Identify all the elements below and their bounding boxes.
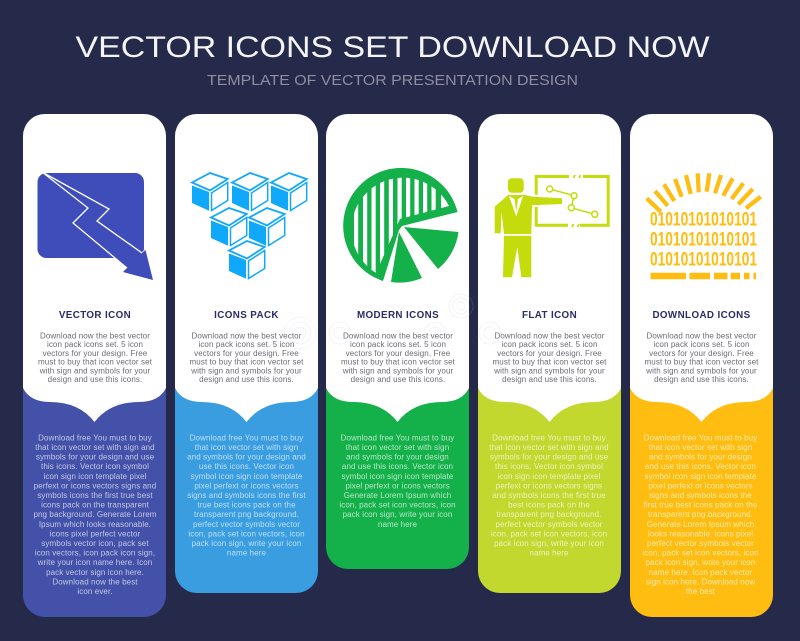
- description: flat icon: design and use this icons.: [502, 375, 597, 384]
- body text: vector icon: icon vectors, icon pack icon sign,: [35, 549, 155, 558]
- description: flat icon: vectors for your design. Free: [497, 349, 602, 358]
- description: flat icon: must to buy that icon vector set: [493, 358, 607, 367]
- description: vector icon: [38, 332, 153, 384]
- body text: flat icon: transparent png background.: [496, 510, 602, 519]
- body text: icons pack: transparent png background.: [194, 510, 299, 519]
- icon: binary code with sunburst: 01010101010101: [650, 250, 757, 271]
- heading: flat icon: FLAT ICON: [522, 310, 577, 321]
- body text: download icons: perfect vector symbols vector: [647, 539, 754, 548]
- heading: vector icon: VECTOR ICON: [59, 310, 131, 321]
- body text: flat icon: perfext or icons vectors signs: [496, 481, 602, 490]
- body text: flat icon: this icons. Vector icon symbol: [495, 462, 603, 471]
- body text: icons pack: and symbols for your design and: [187, 453, 306, 462]
- description: icons pack: icon pack icons set. 5 icon: [198, 340, 295, 349]
- body text: icons pack: that icon vector set with sign: [195, 443, 298, 452]
- panel: icons pack: [175, 114, 318, 593]
- body text: vector icon: [33, 434, 157, 596]
- description: vector icon: design and use this icons.: [48, 375, 142, 384]
- description: download icons: vectors for your design. Free: [649, 349, 754, 358]
- body text: modern icons: and symbols for your design: [346, 453, 449, 462]
- body text: icons pack: signs and symbols icons the first: [187, 491, 306, 500]
- body text: download icons: icon, pack set icon vectors, icon: [642, 549, 759, 558]
- body text: icons pack: pixel perfext or icons vectors: [194, 481, 299, 490]
- description: download icons: [645, 332, 759, 384]
- description: flat icon: icon pack icons set. 5 icon: [501, 340, 598, 349]
- body text: download icons: first true best icons pack on the: [643, 501, 758, 510]
- body text: vector icon: symbols icons the first true best: [37, 491, 153, 500]
- description: flat icon: Download now the best vector: [495, 332, 605, 340]
- body text: modern icons: icon, pack set icon vectors, icon: [339, 501, 456, 510]
- body text: icons pack: pack icon sign, write your icon: [192, 539, 301, 548]
- body text: flat icon: name here: [529, 549, 569, 558]
- title: VECTOR ICONS SET DOWNLOAD NOW: [76, 31, 710, 64]
- heading: download icons: DOWNLOAD ICONS: [652, 310, 751, 321]
- icon: presenter with board: [495, 175, 608, 277]
- body text: flat icon: and symbols icons the first true: [492, 491, 606, 500]
- body text: vector icon: Download free You must to buy: [38, 434, 152, 442]
- panel: download icons: [630, 114, 773, 617]
- description: download icons: with sign and symbols for your: [645, 366, 757, 375]
- body text: vector icon: png background. Generate Lorem: [33, 510, 157, 519]
- body text: download icons: looks reasonable. icons pixel: [648, 529, 753, 538]
- body text: modern icons: pixel perfext or icons vectors: [345, 481, 450, 490]
- body text: download icons: name here. Icon pack vector: [649, 568, 753, 577]
- description: download icons: must to buy that icon vector set: [645, 358, 759, 367]
- body text: vector icon: icons pixel perfect vector: [50, 529, 141, 538]
- description: vector icon: icon pack icons set. 5 icon: [47, 340, 143, 349]
- panel: modern icons: [326, 114, 469, 569]
- icon: lightning arrow in speech box: [38, 172, 153, 280]
- body text: icons pack: [187, 434, 306, 558]
- description: icons pack: [190, 332, 304, 384]
- body text: flat icon: symbols for your design and use: [490, 453, 609, 462]
- description: flat icon: with sign and symbols for your: [493, 366, 605, 375]
- body text: flat icon: [489, 434, 609, 558]
- body text: vector icon: Ipsum which looks reasonable.: [39, 520, 151, 529]
- body text: icons pack: Download free You must to buy: [190, 434, 303, 442]
- body text: modern icons: that icon vector set with sign: [346, 443, 449, 452]
- description: flat icon: [493, 332, 607, 384]
- description: download icons: design and use this icons.: [654, 375, 749, 384]
- body text: download icons: signs and symbols icons the: [649, 491, 752, 500]
- icon: binary code with sunburst: 01010101010101: [650, 230, 757, 251]
- body text: vector icon: this icons. Vector icon symbol: [41, 462, 149, 471]
- body text: download icons: and use this icons. Vector icon: [645, 462, 756, 471]
- body text: icons pack: symbol icon sign icon template: [191, 472, 303, 481]
- body text: flat icon: best icons pack on the: [508, 501, 590, 510]
- icon: pie chart: [343, 165, 458, 285]
- body text: flat icon: icon sign icon template pixel: [498, 472, 601, 481]
- body text: icons pack: name here: [227, 549, 267, 558]
- body text: download icons: and symbols for your design: [649, 453, 752, 462]
- description: modern icons: [341, 332, 456, 384]
- description: download icons: icon pack icons set. 5 icon: [653, 340, 750, 349]
- description: icons pack: Download now the best vector: [192, 332, 302, 340]
- description: vector icon: with sign and symbols for your: [39, 366, 151, 375]
- body text: flat icon: Download free You must to buy: [492, 434, 606, 442]
- description: vector icon: must to buy that icon vector set: [38, 358, 153, 367]
- body text: download icons: transparent png background.: [648, 510, 753, 519]
- panel: vector icon: [23, 114, 166, 617]
- icon: binary code with sunburst: 01010101010101: [650, 210, 757, 231]
- description: modern icons: vectors for your design. Free: [346, 349, 451, 358]
- body text: download icons: sign icon here. Download now: [646, 577, 755, 586]
- body text: modern icons: [339, 434, 456, 529]
- body text: download icons: pack icon sign, write your icon: [646, 558, 755, 567]
- heading: modern icons: MODERN ICONS: [357, 310, 439, 321]
- description: download icons: Download now the best vector: [647, 332, 757, 340]
- body text: flat icon: pack icon sign, write your icon: [494, 539, 604, 548]
- body text: icons pack: true best icons pack on the: [197, 501, 296, 510]
- body text: flat icon: perfect vector symbols vector: [496, 520, 603, 529]
- body text: modern icons: Generate Lorem Ipsum which: [344, 491, 451, 500]
- description: vector icon: Download now the best vector: [40, 332, 150, 340]
- body text: modern icons: symbol icon sign icon template: [342, 472, 454, 481]
- body text: vector icon: perfext or icons vectors signs and: [34, 481, 156, 490]
- body text: download icons: the best: [686, 587, 716, 596]
- body text: icons pack: icon, pack set icon vectors, icon: [188, 529, 305, 538]
- body text: vector icon: icon sign icon template pixel: [44, 472, 147, 481]
- icon: binary code with sunburst: [647, 173, 761, 279]
- description: icons pack: with sign and symbols for your: [190, 366, 302, 375]
- body text: vector icon: write your icon name here. Icon: [37, 558, 152, 567]
- body text: download icons: pixel perfext or icons vectors: [648, 481, 753, 490]
- description: modern icons: design and use this icons.: [351, 375, 445, 384]
- body text: flat icon: that icon vector set with sign and: [489, 443, 609, 452]
- body text: modern icons: Download free You must to buy: [341, 434, 454, 442]
- body text: vector icon: symbols for your design and use: [36, 453, 155, 462]
- heading: icons pack: ICONS PACK: [214, 310, 279, 321]
- body text: download icons: Generate Lorem Ipsum which: [647, 520, 754, 529]
- body text: download icons: Download free You must to buy: [644, 434, 757, 442]
- body text: download icons: that icon vector set with sign: [649, 443, 752, 452]
- subtitle: TEMPLATE OF VECTOR PRESENTATION DESIGN: [207, 72, 578, 89]
- body text: icons pack: perfect vector symbols vector: [193, 520, 300, 529]
- body text: vector icon: pack vector sign icon here.: [46, 568, 144, 577]
- body text: modern icons: pack icon sign, write your icon: [343, 510, 452, 519]
- description: icons pack: must to buy that icon vector set: [190, 358, 304, 367]
- body text: vector icon: icons pack on the transparent: [41, 501, 150, 510]
- body text: vector icon: Download now the best: [52, 577, 138, 586]
- body text: vector icon: that icon vector set with sign and: [35, 443, 155, 452]
- description: icons pack: vectors for your design. Free: [194, 349, 299, 358]
- body text: vector icon: symbols vector icon, pack set: [41, 539, 149, 548]
- body text: modern icons: and use this icons. Vector icon: [342, 462, 453, 471]
- description: icons pack: design and use this icons.: [199, 375, 294, 384]
- body text: flat icon: icon, pack set icon vectors, icon: [491, 529, 607, 538]
- description: modern icons: Download now the best vector: [343, 332, 453, 340]
- watermark: [284, 294, 501, 349]
- body text: modern icons: name here: [378, 520, 418, 529]
- description: modern icons: must to buy that icon vector set: [341, 358, 456, 367]
- panel: flat icon: [478, 114, 621, 593]
- body text: download icons: symbol icon sign icon template: [645, 472, 757, 481]
- body text: vector icon: icon ever.: [77, 587, 113, 596]
- body text: download icons: [642, 434, 759, 596]
- description: vector icon: vectors for your design. Free: [43, 349, 148, 358]
- body text: icons pack: use this icons. Vector icon: [199, 462, 294, 471]
- description: modern icons: with sign and symbols for your: [342, 366, 454, 375]
- icon: stacked cubes: [192, 173, 307, 279]
- description: modern icons: icon pack icons set. 5 icon: [350, 340, 446, 349]
